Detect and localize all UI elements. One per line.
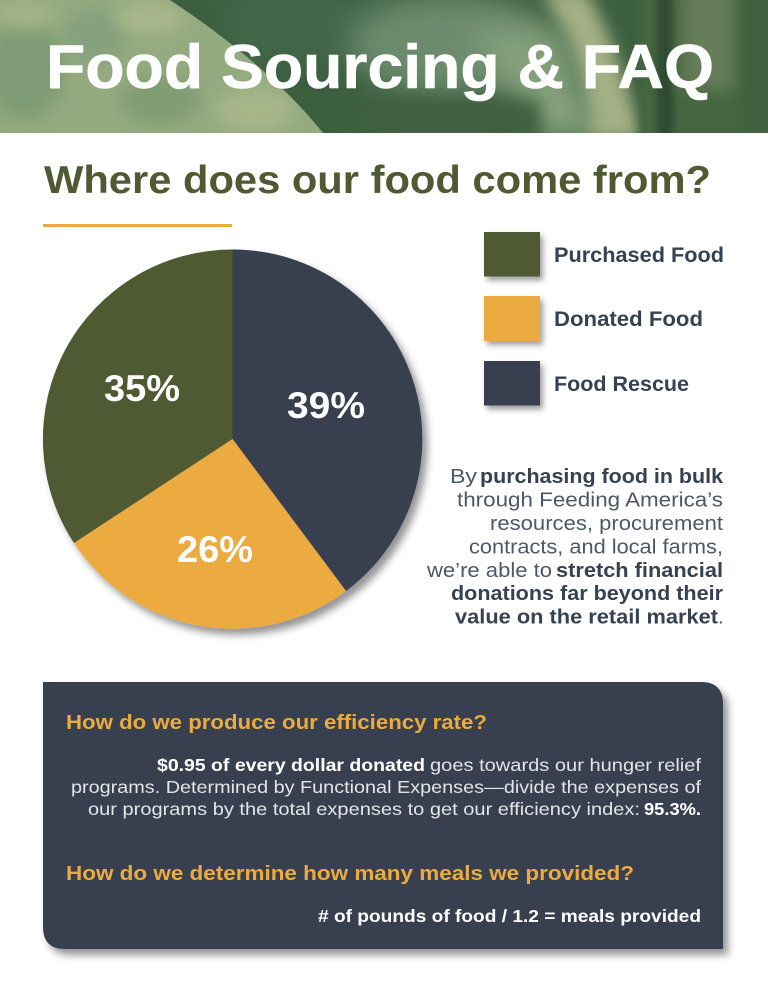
label: 35%: 35% xyxy=(104,368,180,409)
FAQ answer: efficiency rate: $0.95 of every dollar donated xyxy=(157,755,425,775)
pie slices xyxy=(43,249,422,629)
purchasing paragraph: By xyxy=(450,466,477,488)
panel background xyxy=(43,682,723,949)
section heading: Where does our food come from? xyxy=(44,159,711,202)
purchasing paragraph: through Feeding America’s xyxy=(457,490,723,512)
header photo banner xyxy=(0,0,768,145)
FAQ question: meals provided: How do we determine how many meals we provided? xyxy=(66,863,634,885)
swatch: donated food xyxy=(484,296,540,341)
FAQ answer: efficiency rate xyxy=(71,755,701,819)
purchasing paragraph: we’re able to xyxy=(426,560,552,582)
swatch: purchased food xyxy=(484,232,540,276)
purchasing paragraph: donations far beyond their xyxy=(451,583,723,605)
purchasing paragraph xyxy=(426,466,724,628)
melon xyxy=(0,0,323,133)
FAQ answer: efficiency rate: our programs by the total expenses to get our efficiency index: xyxy=(88,799,640,819)
legend label: purchased food: Purchased Food xyxy=(554,244,724,267)
FAQ question: efficiency rate: How do we produce our efficiency rate? xyxy=(66,712,487,734)
pie chart xyxy=(43,249,422,629)
legend label: donated food: Donated Food xyxy=(554,308,703,331)
FAQ answer: efficiency rate: programs. Determined by Functional Expenses—divide the expenses of xyxy=(71,777,701,797)
title: Food Sourcing & FAQ xyxy=(46,33,714,102)
FAQ answer: efficiency rate: goes towards our hunger relief xyxy=(430,755,701,775)
FAQ answer: efficiency rate: 95.3%. xyxy=(644,799,701,819)
purchasing paragraph: value on the retail market xyxy=(455,606,718,628)
purchasing paragraph: . xyxy=(718,606,724,628)
legend xyxy=(484,232,724,406)
purchasing paragraph: stretch financial xyxy=(556,560,723,582)
purchasing paragraph: resources, procurement xyxy=(490,513,723,535)
FAQ panel xyxy=(43,682,723,949)
FAQ answer: meals formula: # of pounds of food / 1.2 = meals provided xyxy=(318,906,701,926)
legend label: food rescue: Food Rescue xyxy=(554,373,689,396)
heading underline xyxy=(43,224,232,227)
purchasing paragraph: purchasing food in bulk xyxy=(480,466,724,488)
purchasing paragraph: contracts, and local farms, xyxy=(469,536,723,558)
swatch: food rescue xyxy=(484,361,540,406)
label: 39%: 39% xyxy=(287,385,365,426)
label: 26%: 26% xyxy=(177,529,253,570)
